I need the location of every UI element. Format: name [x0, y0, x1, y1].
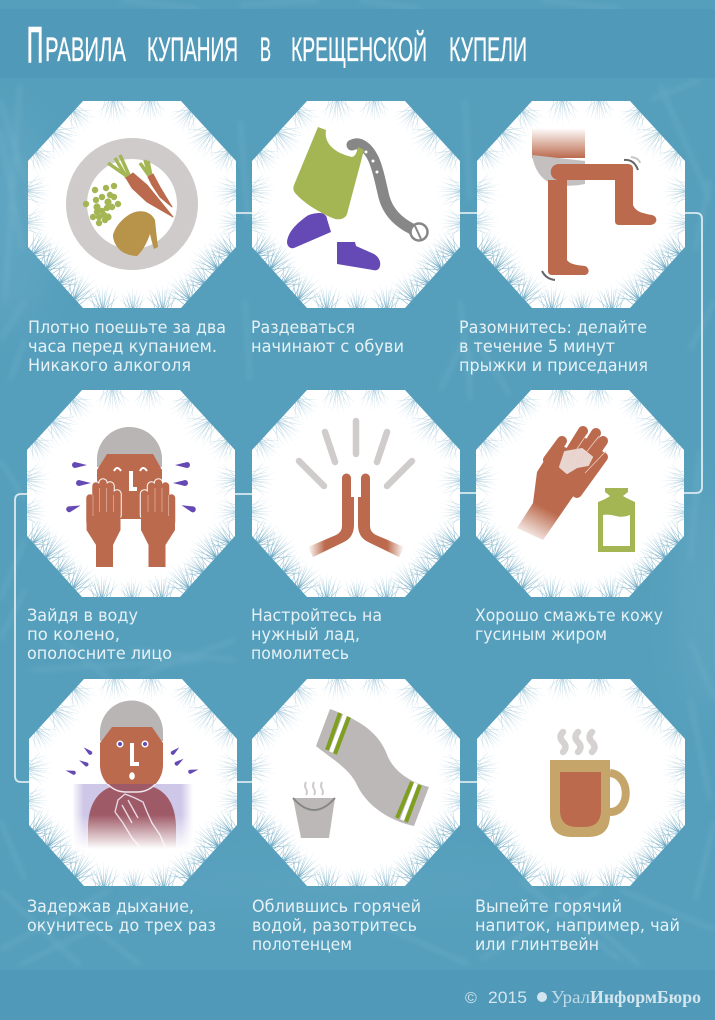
caption: Никакого алкоголя	[28, 356, 191, 376]
caption	[475, 897, 680, 955]
caption: Выпейте горячий	[475, 897, 622, 917]
caption: окунитесь до трех раз	[27, 916, 216, 936]
icon: belt	[352, 144, 428, 240]
panel: step 8 towel	[246, 675, 465, 955]
caption: по колено,	[27, 625, 120, 645]
icon: towel	[316, 709, 429, 826]
footer credit: ИнформБюро	[590, 987, 701, 1007]
caption: прыжки и приседания	[459, 356, 648, 376]
octagon	[470, 386, 689, 601]
caption: Настройтесь на	[251, 606, 382, 626]
header band	[0, 9, 715, 78]
caption: гусиным жиром	[475, 625, 607, 645]
icon: shirt	[293, 127, 364, 219]
octagon	[21, 386, 240, 601]
caption: Разомнитесь: делайте	[459, 318, 647, 338]
caption	[251, 318, 404, 357]
caption: Хорошо смажьте кожу	[475, 606, 663, 626]
caption	[252, 897, 421, 955]
caption	[28, 318, 226, 376]
octagon	[246, 386, 465, 601]
icon: man washing face	[65, 427, 197, 567]
icon: fat jar	[598, 488, 635, 552]
caption: Задержав дыхание,	[27, 897, 194, 917]
icon: praying hands	[299, 421, 412, 557]
title: РАВИЛА	[45, 31, 126, 69]
octagon	[246, 675, 465, 890]
caption: Плотно поешьте за два	[28, 318, 226, 338]
title: КУПЕЛИ	[449, 31, 527, 69]
octagon	[246, 97, 465, 312]
panel: step 1 eat	[22, 97, 241, 376]
panel: step 3 warm up	[459, 97, 690, 376]
panel: step 7 dip	[23, 675, 242, 936]
panel: step 9 hot drink	[471, 675, 690, 955]
caption: Облившись горячей	[252, 897, 421, 917]
octagon	[22, 97, 241, 312]
caption: Раздеваться	[251, 318, 355, 338]
caption	[459, 318, 648, 376]
footer credit	[465, 987, 701, 1007]
connector line between steps	[15, 213, 702, 782]
panel: step 4 wash face	[21, 386, 240, 664]
caption: в течение 5 минут	[459, 337, 615, 357]
caption: полотенцем	[252, 935, 352, 955]
title: КРЕЩЕНСКОЙ	[291, 31, 427, 69]
title: КУПАНИЯ	[147, 31, 238, 69]
icon: legs	[532, 128, 656, 280]
caption: нужный лад,	[251, 625, 360, 645]
icon: shoes	[287, 213, 380, 270]
icon: plate with food	[76, 148, 188, 260]
octagon	[471, 97, 690, 312]
footer credit: Урал	[551, 987, 590, 1007]
caption	[251, 606, 382, 664]
octagon	[23, 675, 242, 890]
caption: начинают с обуви	[251, 337, 404, 357]
caption: напиток, например, чай	[475, 916, 680, 936]
caption: или глинтвейн	[475, 935, 599, 955]
title: П	[27, 17, 43, 73]
title	[27, 17, 527, 73]
caption: Зайдя в воду	[27, 606, 138, 626]
caption	[27, 897, 216, 936]
footer band	[0, 970, 715, 1020]
caption: часа перед купанием.	[28, 337, 217, 357]
panel: step 2 undress	[246, 97, 465, 357]
caption	[475, 606, 663, 645]
octagon	[471, 675, 690, 890]
caption: помолитесь	[251, 644, 349, 664]
icon: mug	[550, 732, 626, 837]
caption	[27, 606, 172, 664]
caption: ополосните лицо	[27, 644, 172, 664]
footer credit: ©	[465, 990, 477, 1007]
panel: step 5 pray	[246, 386, 465, 664]
panel: step 6 grease skin	[470, 386, 689, 645]
icon: bucket	[293, 782, 335, 838]
caption: водой, разотритесь	[252, 916, 417, 936]
title: В	[260, 31, 271, 69]
icon: hand with goose fat	[517, 431, 606, 540]
footer credit: 2015	[488, 988, 527, 1007]
icon: man dipping in water	[65, 701, 199, 850]
